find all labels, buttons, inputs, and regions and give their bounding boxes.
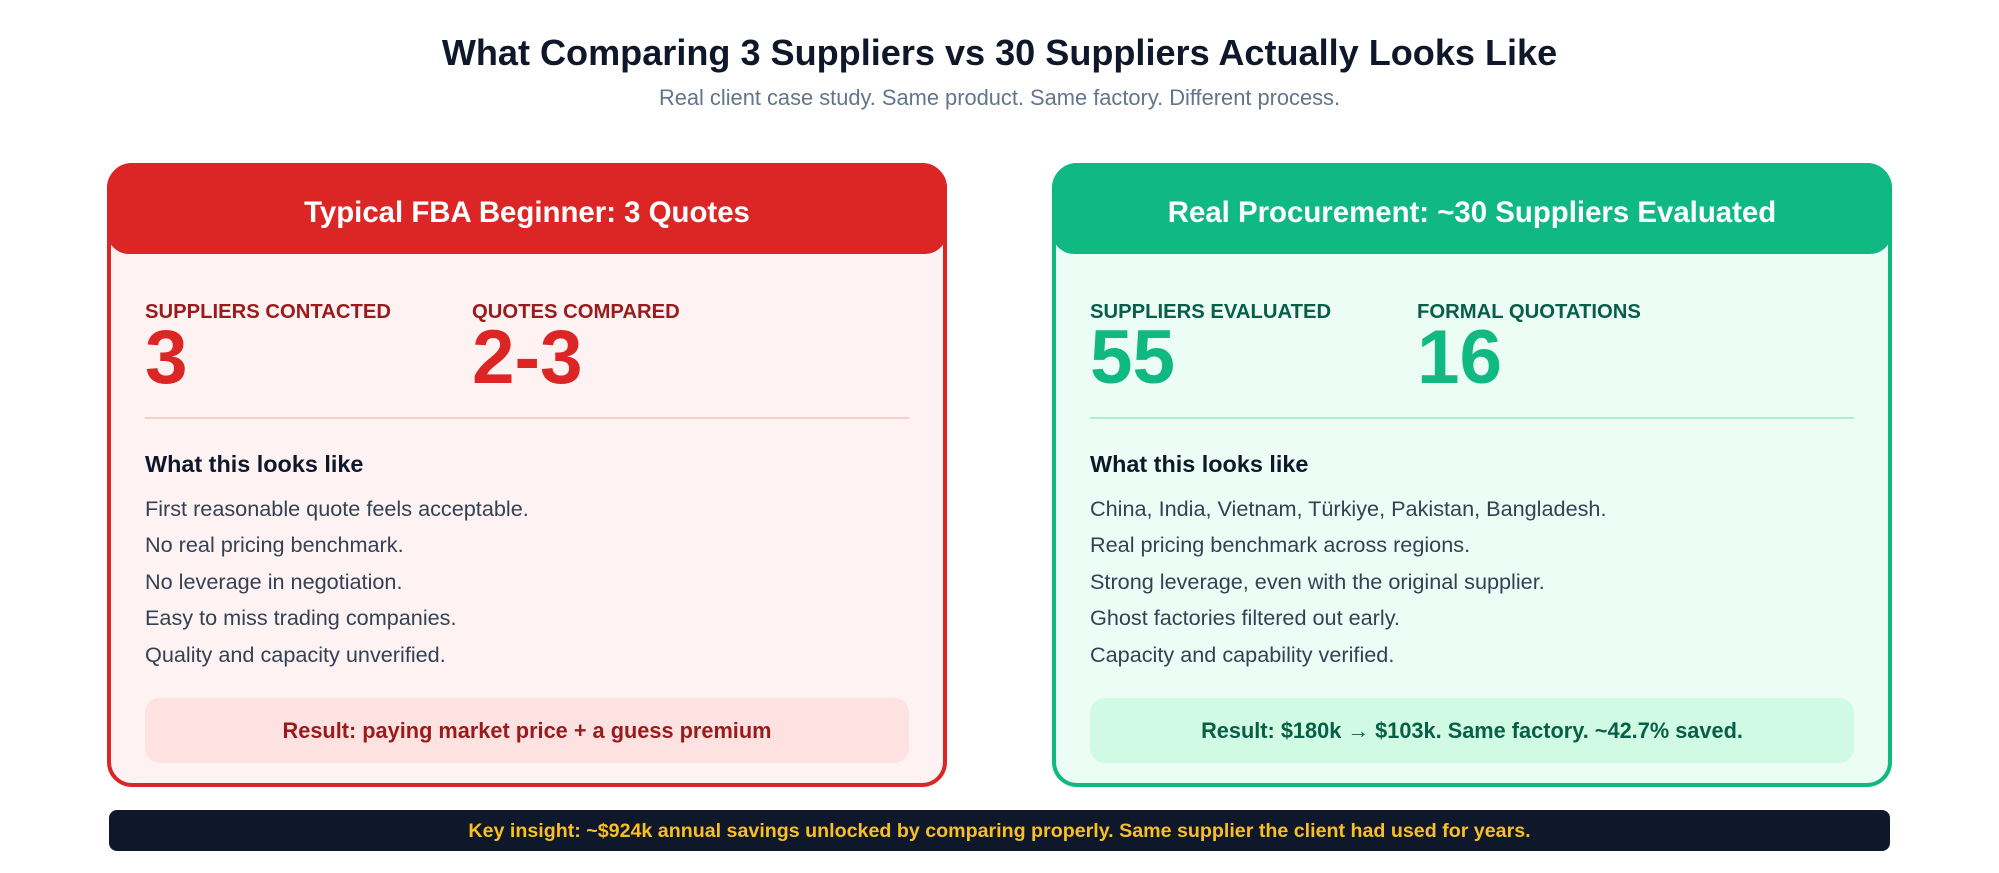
text block: description lines: Easy to miss trading companies.: [145, 605, 457, 630]
subheading: What this looks like: [1090, 451, 1308, 477]
text block: description lines: [145, 496, 529, 667]
text block: description lines: Ghost factories filtered out early.: [1090, 605, 1400, 630]
panel: real procurement: [1052, 163, 1892, 787]
result callout: Result: paying market price + a guess premium: [283, 718, 771, 743]
panel header: [107, 163, 947, 254]
key insight bar: Key insight: ~$924k annual savings unlocked by comparing properly. Same supplier the client had used for years.: [468, 820, 1531, 842]
stat label: suppliers contacted: SUPPLIERS CONTACTED: [145, 301, 391, 323]
stat value: suppliers contacted: 3: [145, 314, 188, 400]
stat label: formal quotations: FORMAL QUOTATIONS: [1417, 301, 1641, 323]
panel header: [1052, 163, 1892, 254]
stat value: suppliers evaluated: 55: [1090, 314, 1175, 400]
panel header: Real Procurement: ~30 Suppliers Evaluated: [1168, 196, 1776, 229]
result callout: [145, 698, 909, 763]
text block: description lines: Quality and capacity unverified.: [145, 642, 446, 667]
panel header: Typical FBA Beginner: 3 Quotes: [304, 196, 750, 229]
text block: description lines: Strong leverage, even with the original supplier.: [1090, 569, 1545, 594]
key insight bar: [109, 810, 1890, 851]
text block: description lines: Capacity and capability verified.: [1090, 642, 1394, 667]
text block: description lines: [1090, 496, 1606, 667]
stat value: formal quotations: 16: [1417, 314, 1502, 400]
text block: description lines: No real pricing benchmark.: [145, 532, 404, 557]
panel: typical FBA beginner: [107, 163, 947, 787]
result callout: [1090, 698, 1854, 763]
text block: description lines: China, India, Vietnam, Türkiye, Pakistan, Bangladesh.: [1090, 496, 1606, 521]
text block: description lines: Real pricing benchmark across regions.: [1090, 532, 1470, 557]
result callout: Result: $180k → $103k. Same factory. ~42.7% saved.: [1201, 718, 1743, 743]
title: What Comparing 3 Suppliers vs 30 Suppliers Actually Looks Like: [442, 32, 1557, 73]
stat label: suppliers evaluated: SUPPLIERS EVALUATED: [1090, 301, 1331, 323]
subtitle: Real client case study. Same product. Same factory. Different process.: [659, 85, 1340, 110]
text block: description lines: First reasonable quote feels acceptable.: [145, 496, 529, 521]
stat value: quotes compared: 2-3: [472, 314, 583, 400]
text block: description lines: No leverage in negotiation.: [145, 569, 402, 594]
stat label: quotes compared: QUOTES COMPARED: [472, 301, 680, 323]
subheading: What this looks like: [145, 451, 363, 477]
